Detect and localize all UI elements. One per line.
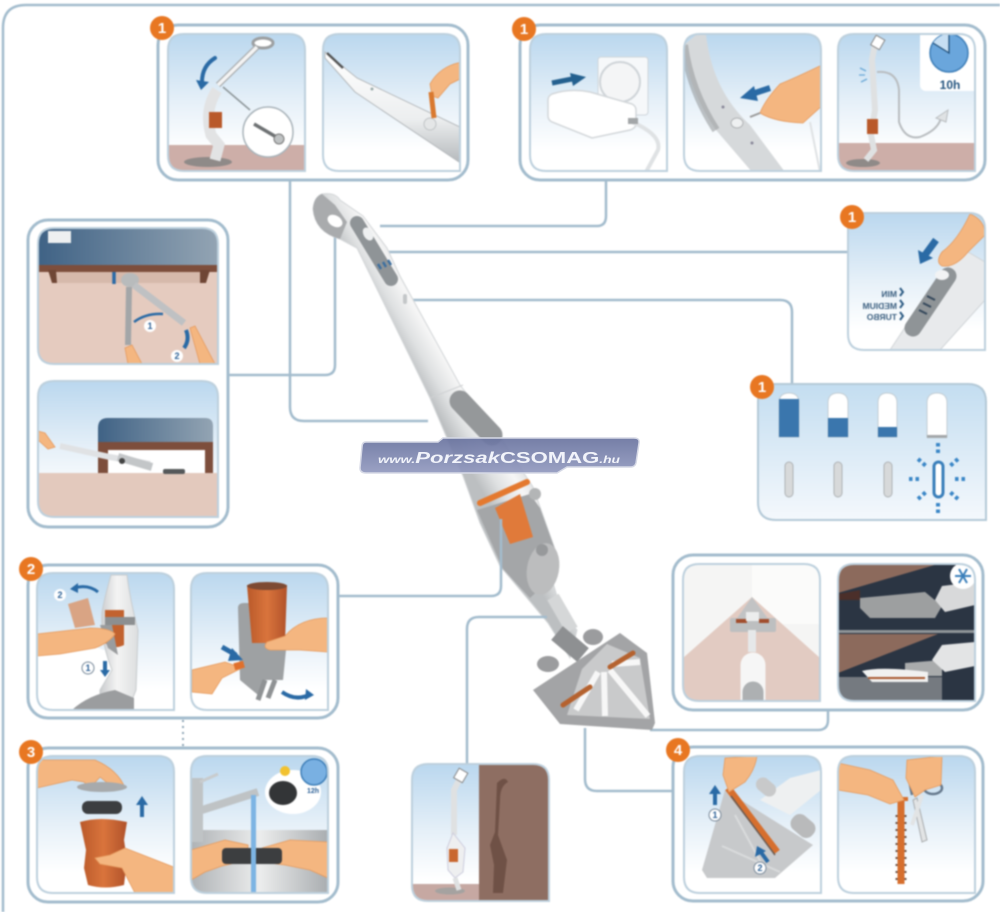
tile: release container xyxy=(191,573,328,710)
neck xyxy=(553,597,572,630)
watermark banner xyxy=(360,438,639,473)
badge 1: 1 xyxy=(520,21,528,38)
badge 3: 3 xyxy=(27,744,35,761)
badge 1 xyxy=(512,17,536,41)
tile: wash under tap: 12h xyxy=(307,788,319,795)
battery full xyxy=(779,393,799,437)
battery half xyxy=(828,393,848,437)
vacuum body shell xyxy=(313,194,577,658)
tile: wash under tap xyxy=(191,756,328,894)
tile: vacuum folding xyxy=(168,34,305,171)
badge 3 xyxy=(19,740,43,764)
panel: clean brush strips xyxy=(666,738,983,901)
motor housing xyxy=(477,494,557,598)
badge 4 xyxy=(666,738,690,762)
badge 1: 1 xyxy=(758,379,766,396)
tile: remove strip: 2 xyxy=(757,863,763,873)
panel: speed control xyxy=(840,205,985,350)
badge 1 xyxy=(150,16,174,40)
panel: top-left storage xyxy=(150,16,468,180)
badge 4: 4 xyxy=(674,742,683,759)
main vacuum cleaner xyxy=(313,194,655,730)
mirrored speed labels xyxy=(863,289,897,322)
tile: bed from front: 1 xyxy=(147,321,153,331)
watermark banner: www. Porzsak CSOMAG .hu xyxy=(378,450,620,467)
connector lines xyxy=(228,180,848,791)
panel: battery indicators xyxy=(750,375,986,520)
connector to upright tile xyxy=(467,617,547,765)
tile: bed from front: 2 xyxy=(174,351,180,361)
tile: dark under furniture xyxy=(838,563,976,701)
panel: empty dust container xyxy=(19,557,338,718)
indicator lights xyxy=(785,462,892,497)
tile: charging with clock: 10h xyxy=(940,78,960,92)
tile: open container xyxy=(37,756,176,893)
badge 1: 1 xyxy=(848,209,856,226)
dotted link between steps xyxy=(182,720,184,746)
tile: tube and finger xyxy=(323,34,462,171)
mirrored speed labels: MIN xyxy=(881,289,897,299)
orange dust container xyxy=(495,494,533,544)
tile: remove strip: 1 xyxy=(712,810,718,820)
badge 2: 2 xyxy=(27,561,35,578)
tile: upright storage against wall xyxy=(412,764,549,901)
panel: corners and under furniture nozzle xyxy=(673,555,983,710)
tile: bed from front xyxy=(38,228,218,364)
tile: charge plug xyxy=(684,34,824,172)
tile: corner cleaning xyxy=(683,564,822,704)
connector to dust container xyxy=(338,519,501,596)
charge indicator xyxy=(403,294,407,304)
tile: adapter and socket xyxy=(530,34,667,172)
panel: wash filter xyxy=(19,740,338,902)
panel: charging xyxy=(512,17,985,180)
clock inset xyxy=(919,34,974,92)
body joint and gray oval xyxy=(430,385,463,398)
tile: cut hair from strip xyxy=(838,756,975,893)
tile: charging with clock xyxy=(838,30,980,171)
badge 2 xyxy=(19,557,43,581)
tile: bed from side xyxy=(38,381,218,518)
mirrored speed labels: TURBO xyxy=(866,312,897,322)
tile: remove container xyxy=(28,573,174,710)
badge 1 xyxy=(750,375,774,399)
badge 1: 1 xyxy=(158,20,166,37)
battery low xyxy=(878,393,897,437)
panel: under furniture xyxy=(28,220,228,527)
battery empty xyxy=(927,393,947,438)
handle grip xyxy=(313,194,347,239)
mirrored speed labels: MEDIUM xyxy=(863,301,897,311)
tile: remove container: 2 xyxy=(57,590,63,600)
tile: remove container: 1 xyxy=(85,663,91,673)
triangular floor nozzle xyxy=(533,633,655,730)
tile: remove strip xyxy=(684,756,821,893)
control strip xyxy=(357,223,391,279)
blinking indicator xyxy=(909,443,967,515)
badge 1 xyxy=(840,205,864,229)
